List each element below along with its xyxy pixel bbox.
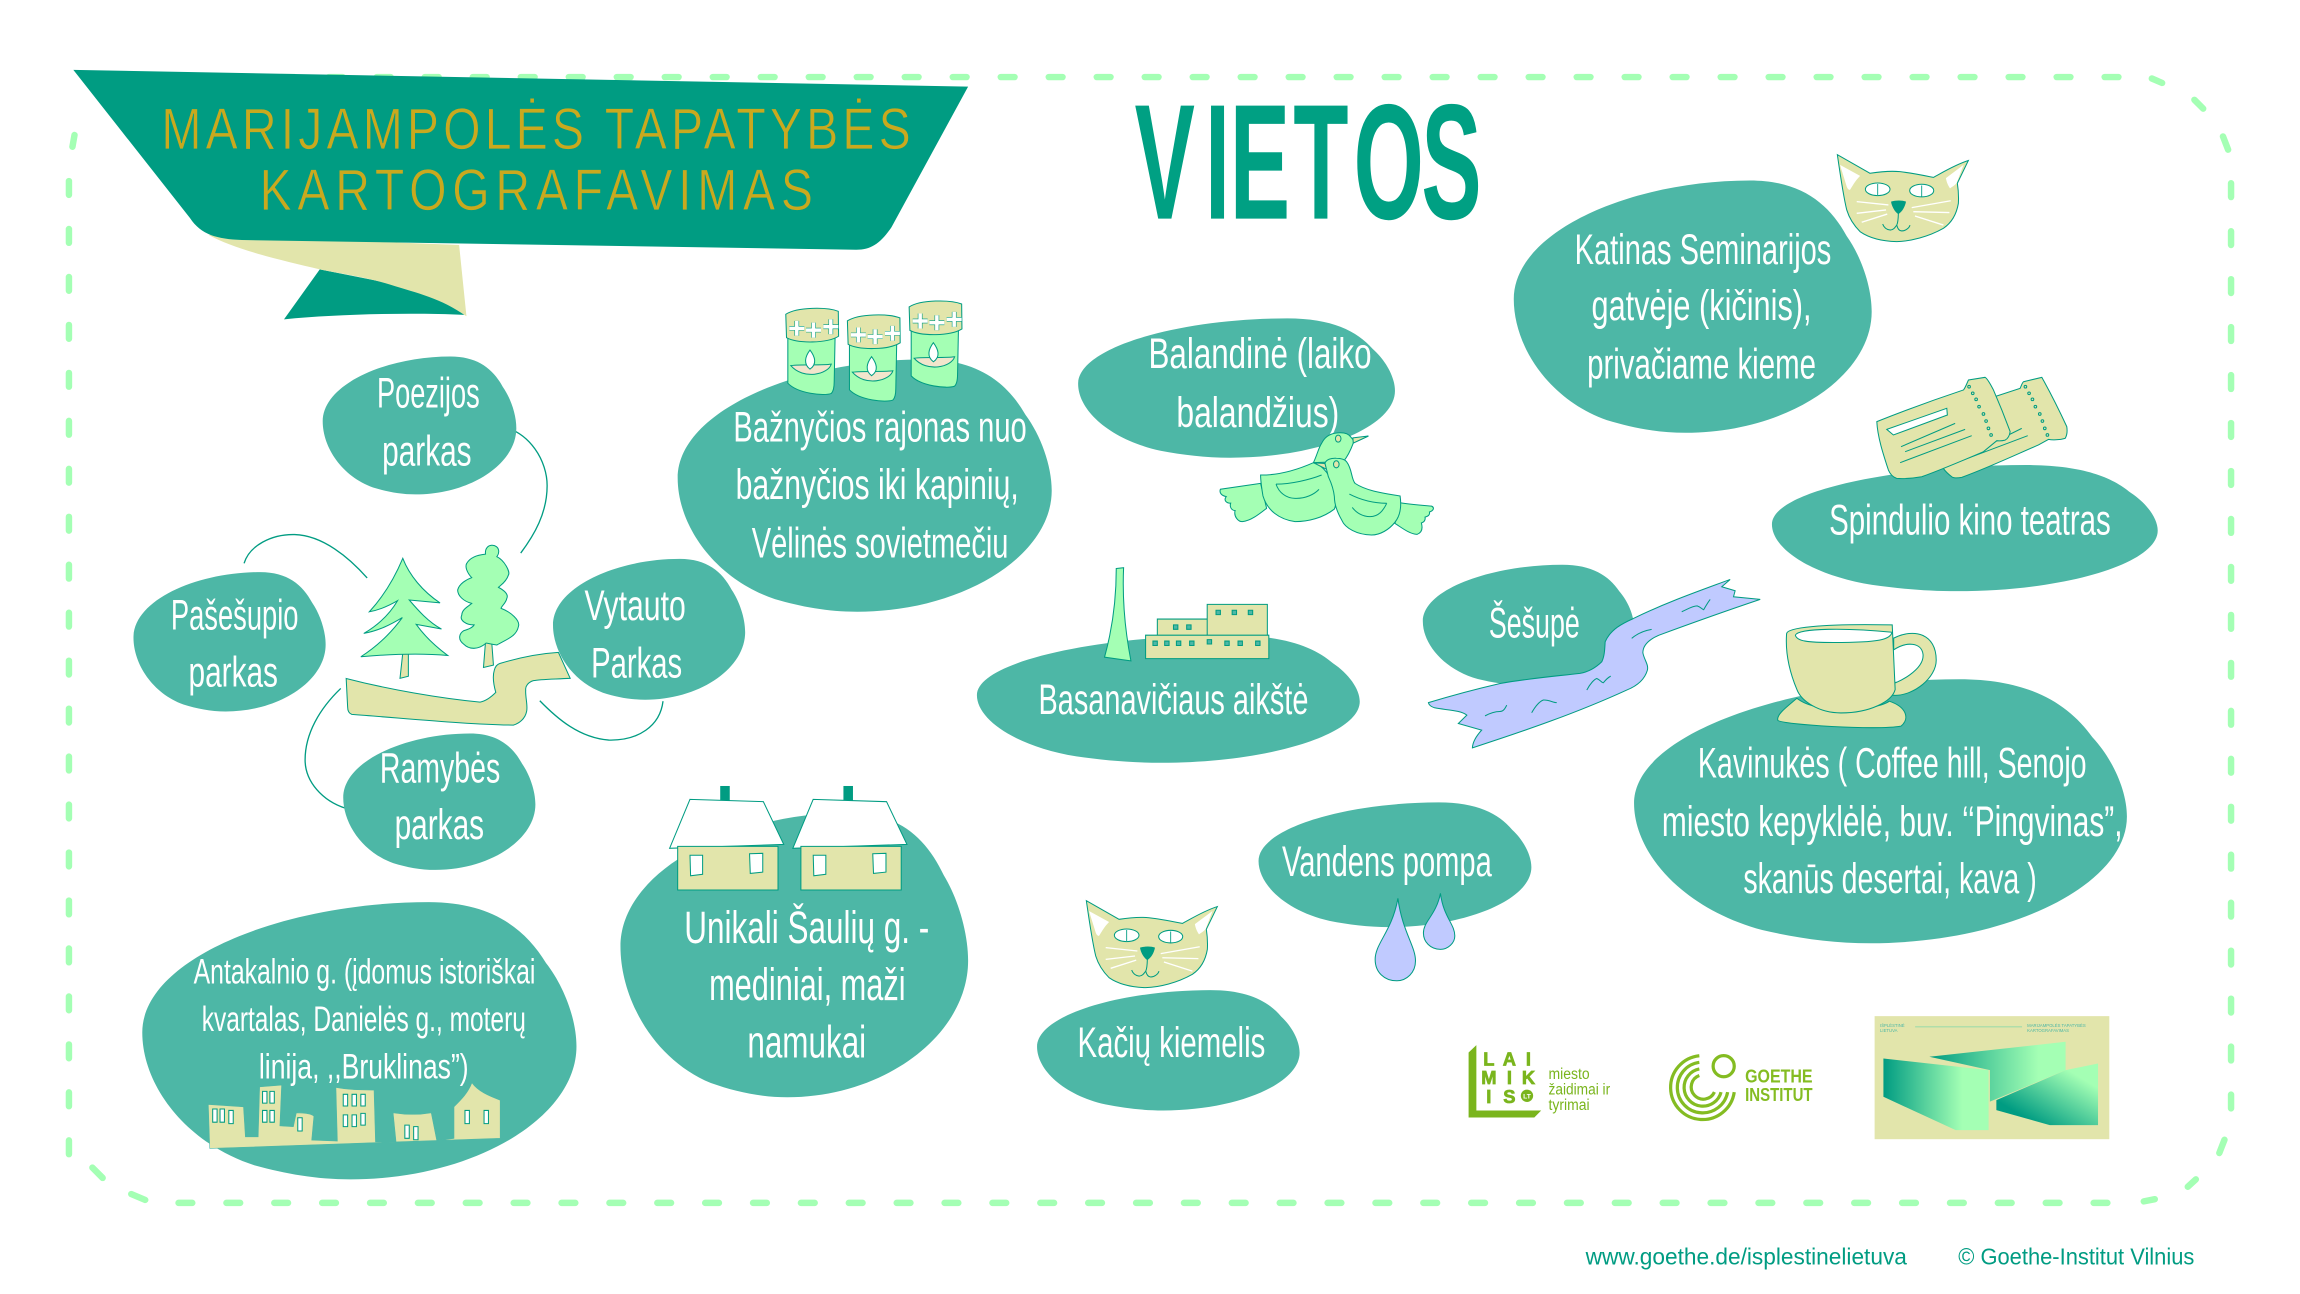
bubble: Vandens pompa: Vandens pompa — [1282, 838, 1492, 886]
bubble: Poezijos parkas: parkas — [382, 428, 472, 476]
bubble: Bažnyčios rajonas: bažnyčios iki kapinių, — [736, 461, 1019, 509]
bubble: Poezijos parkas: Poezijos — [377, 369, 480, 417]
icon: winding park path — [346, 652, 570, 725]
logo: Laimikis: A — [1503, 1049, 1516, 1070]
candle 3 — [909, 301, 962, 387]
bubble: Kavinukės: skanūs desertai, kava ) — [1743, 855, 2037, 903]
icon: park path with trees — [346, 545, 570, 725]
title text: KARTOGRAFAVIMAS — [260, 157, 813, 223]
heading: VIETOS: VIETOS — [1135, 71, 1482, 255]
bubble: Antakalnio g. — [142, 902, 576, 1179]
bubble: Poezijos parkas — [323, 356, 516, 494]
bubble: Unikali Šaulių g.: Unikali Šaulių g. - — [684, 902, 929, 953]
bubble: Pašešupio parkas: parkas — [188, 649, 278, 697]
bubble: Ramybės parkas — [343, 733, 535, 870]
logo: Laimikis: tyrimai — [1549, 1097, 1590, 1114]
candle 2 — [847, 315, 900, 401]
logo: Laimikis: K — [1522, 1067, 1536, 1088]
bubble: Vytauto Parkas — [553, 559, 745, 700]
bubble: Unikali Šaulių g.: namukai — [747, 1017, 866, 1068]
house 2 — [793, 786, 907, 890]
bubble: Balandinė — [1078, 318, 1395, 458]
right dove — [1314, 458, 1433, 535]
bubble: Kavinukės: Kavinukės ( Coffee hill, Senojo — [1698, 739, 2087, 787]
logo: Laimikis: M — [1481, 1067, 1496, 1088]
icon: two doves — [1220, 433, 1433, 535]
bubble: Ramybės parkas: parkas — [395, 801, 484, 849]
logo: Goethe-Institut — [1671, 1056, 1813, 1120]
bubble: Balandinė: balandžius) — [1176, 389, 1339, 437]
bubble: Vytauto Parkas: Parkas — [591, 640, 682, 688]
logo: Goethe-Institut: INSTITUT — [1745, 1084, 1813, 1105]
icon: cat head, Kačių kiemelis — [1086, 901, 1217, 988]
bubble: Basanavičiaus aikštė: Basanavičiaus aikštė — [1039, 676, 1308, 724]
logo: Laimikis: I — [1507, 1067, 1512, 1088]
bubble: Bažnyčios rajonas: Bažnyčios rajonas nuo — [733, 404, 1027, 452]
icon: river Šešupė — [1428, 579, 1760, 748]
bubble: Katinas Seminarijos: Katinas Seminarijos — [1575, 226, 1831, 274]
logo: Laimikis: LT — [1523, 1094, 1532, 1101]
icon: three grave candles — [786, 301, 962, 401]
bubble: Kavinukės — [1634, 679, 2127, 943]
bubble: Basanavičiaus aikštė — [977, 635, 1360, 763]
house 1 — [670, 786, 784, 890]
bubble: Ramybės parkas: Ramybės — [380, 745, 500, 793]
bubble: Šešupė — [1423, 565, 1634, 685]
logo: Laimikis: I — [1526, 1049, 1531, 1070]
title ribbon — [73, 70, 968, 319]
ribbon band — [73, 70, 968, 250]
logo: Laimikis — [1469, 1045, 1610, 1117]
back ticket — [1943, 377, 2067, 478]
icon: deciduous tree — [458, 545, 519, 667]
footer links: www.goethe.de/isplestinelietuva — [1585, 1243, 1907, 1269]
project card: MARIJAMPOLĖS TAPATYBĖS — [2027, 1023, 2086, 1028]
bubble: Spindulio kino teatras: Spindulio kino teatras — [1829, 497, 2111, 545]
bubble: Vytauto Parkas: Vytauto — [585, 582, 686, 630]
icon: cat head — [1837, 155, 1968, 242]
bubble: Antakalnio g.: linija, ,,Bruklinas”) — [259, 1047, 469, 1086]
bubble: Vandens pompa — [1259, 802, 1531, 927]
bubble: Unikali Šaulių g.: mediniai, maži — [709, 959, 906, 1010]
ribbon tail — [284, 269, 464, 319]
bubble: Kačių kiemelis — [1037, 990, 1300, 1110]
bubble: Balandinė: Balandinė (laiko — [1149, 330, 1371, 378]
bubble: Spindulio kino teatras — [1772, 465, 2158, 591]
footer links: © Goethe-Institut Vilnius — [1958, 1243, 2194, 1269]
icon: coffee cup on saucer — [1778, 625, 1936, 728]
candle 1 — [786, 308, 839, 395]
bubble: Pašešupio parkas: Pašešupio — [171, 591, 299, 639]
footer links — [1585, 1243, 2194, 1269]
bubble: Antakalnio g.: kvartalas, Danielės g., moterų — [202, 1000, 526, 1039]
logo: Laimikis: I — [1486, 1086, 1491, 1107]
logo: Laimikis: žaidimai ir — [1549, 1081, 1610, 1098]
icon: factory chimney and buildings — [1105, 568, 1269, 661]
bubble: Katinas Seminarijos: privačiame kieme — [1587, 340, 1816, 388]
bubble: Pašešupio parkas — [133, 572, 326, 711]
project card: IŠPLĖSTINĖ — [1880, 1023, 1905, 1028]
project card: LIETUVA — [1880, 1028, 1898, 1033]
bubble: Katinas Seminarijos — [1514, 180, 1872, 433]
bubble: Kačių kiemelis: Kačių kiemelis — [1078, 1019, 1265, 1067]
icon: pine tree — [361, 558, 448, 678]
title text — [161, 97, 911, 223]
bubble: Bažnyčios rajonas — [678, 359, 1052, 612]
icon: cinema tickets — [1877, 377, 2067, 479]
front ticket — [1877, 377, 2010, 479]
ribbon fold — [208, 235, 466, 316]
logo: Laimikis: L — [1483, 1049, 1494, 1070]
bubble: Bažnyčios rajonas: Vėlinės sovietmečiu — [752, 519, 1008, 567]
project card — [1875, 1016, 2109, 1139]
title text: MARIJAMPOLĖS TAPATYBĖS — [161, 97, 911, 162]
logo: Laimikis: miesto — [1549, 1066, 1590, 1083]
project card: KARTOGRAFAVIMAS — [2027, 1028, 2069, 1033]
icon: wooden houses — [670, 786, 907, 890]
left dove — [1220, 433, 1368, 522]
bubble: Unikali Šaulių g. — [620, 813, 968, 1097]
bubble: Šešupė: Šešupė — [1489, 599, 1580, 647]
bubble: Antakalnio g.: Antakalnio g. (įdomus istoriškai — [194, 952, 535, 991]
logo: Goethe-Institut: GOETHE — [1745, 1066, 1813, 1087]
logo: Laimikis: S — [1503, 1086, 1515, 1107]
icon: city skyline — [208, 1083, 500, 1148]
bubble: Katinas Seminarijos: gatvėje (kičinis), — [1592, 282, 1812, 330]
bubble: Kavinukės: miesto kepyklėlė, buv. ‘‘Pingvinas”, — [1662, 798, 2123, 846]
icon: water drops — [1375, 893, 1455, 981]
connector lines around the park illustration — [244, 425, 663, 808]
